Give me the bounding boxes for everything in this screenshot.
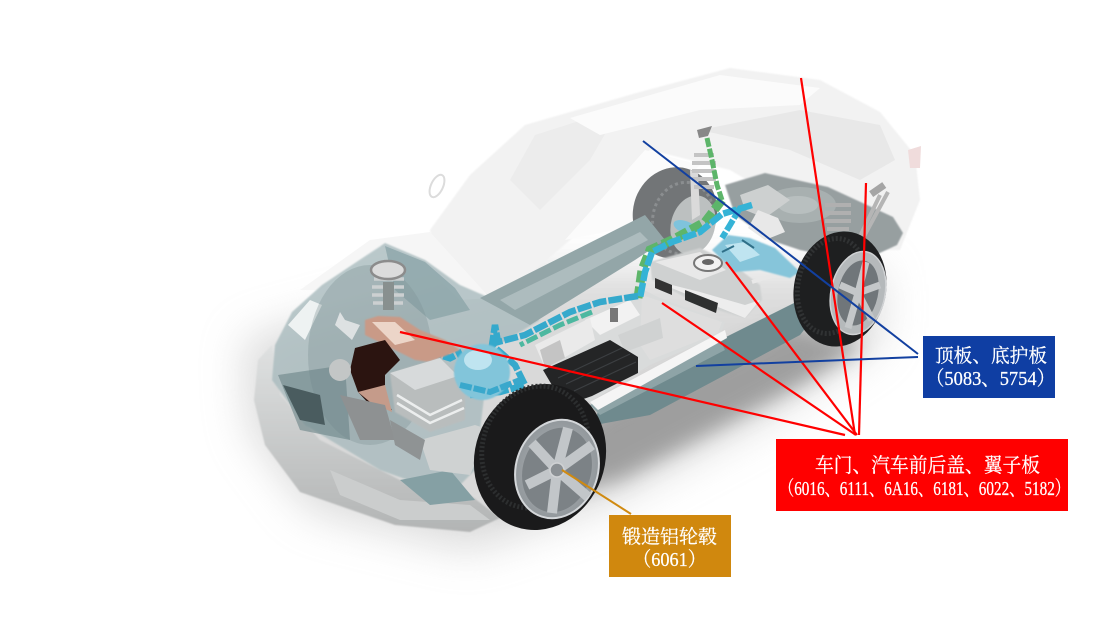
high-voltage cable harness (430, 138, 752, 395)
rear electric motor (672, 217, 800, 278)
label: forged aluminium wheel hub (609, 515, 731, 577)
red leader lines (400, 78, 866, 435)
front wheel with forged aluminium hub (454, 365, 626, 549)
front bumper (254, 345, 500, 532)
black battery pack (543, 340, 638, 402)
silver inverter box (390, 358, 490, 475)
front blue motor (454, 344, 520, 400)
far rear wheel (623, 158, 727, 268)
front coil spring (371, 261, 405, 310)
chassis floor rails (480, 215, 820, 425)
front engine bay shell (272, 243, 540, 505)
orange leader line (562, 470, 631, 514)
label: doors, hood, fenders (776, 439, 1070, 511)
label: roof and underbody panels: 顶板、底护板 (935, 345, 1047, 367)
label: forged aluminium wheel hub: 锻造铝轮毂 (622, 526, 717, 548)
rear floor and trunk well (725, 173, 903, 262)
rear wheel (783, 223, 897, 355)
car body and ground shadow (245, 68, 921, 550)
label: forged aluminium wheel hub: （6061） (633, 549, 706, 571)
fuel tank (650, 248, 800, 318)
label: roof and underbody panels: （5083、5754） (926, 368, 1055, 390)
blue leader lines (643, 141, 918, 366)
copper engine block (329, 312, 460, 440)
label: doors, hood, fenders: 车门、汽车前后盖、翼子板 (815, 454, 1040, 477)
rear suspension springs (692, 126, 888, 255)
battery floor tray (535, 288, 727, 410)
label: roof and underbody panels (923, 336, 1055, 398)
